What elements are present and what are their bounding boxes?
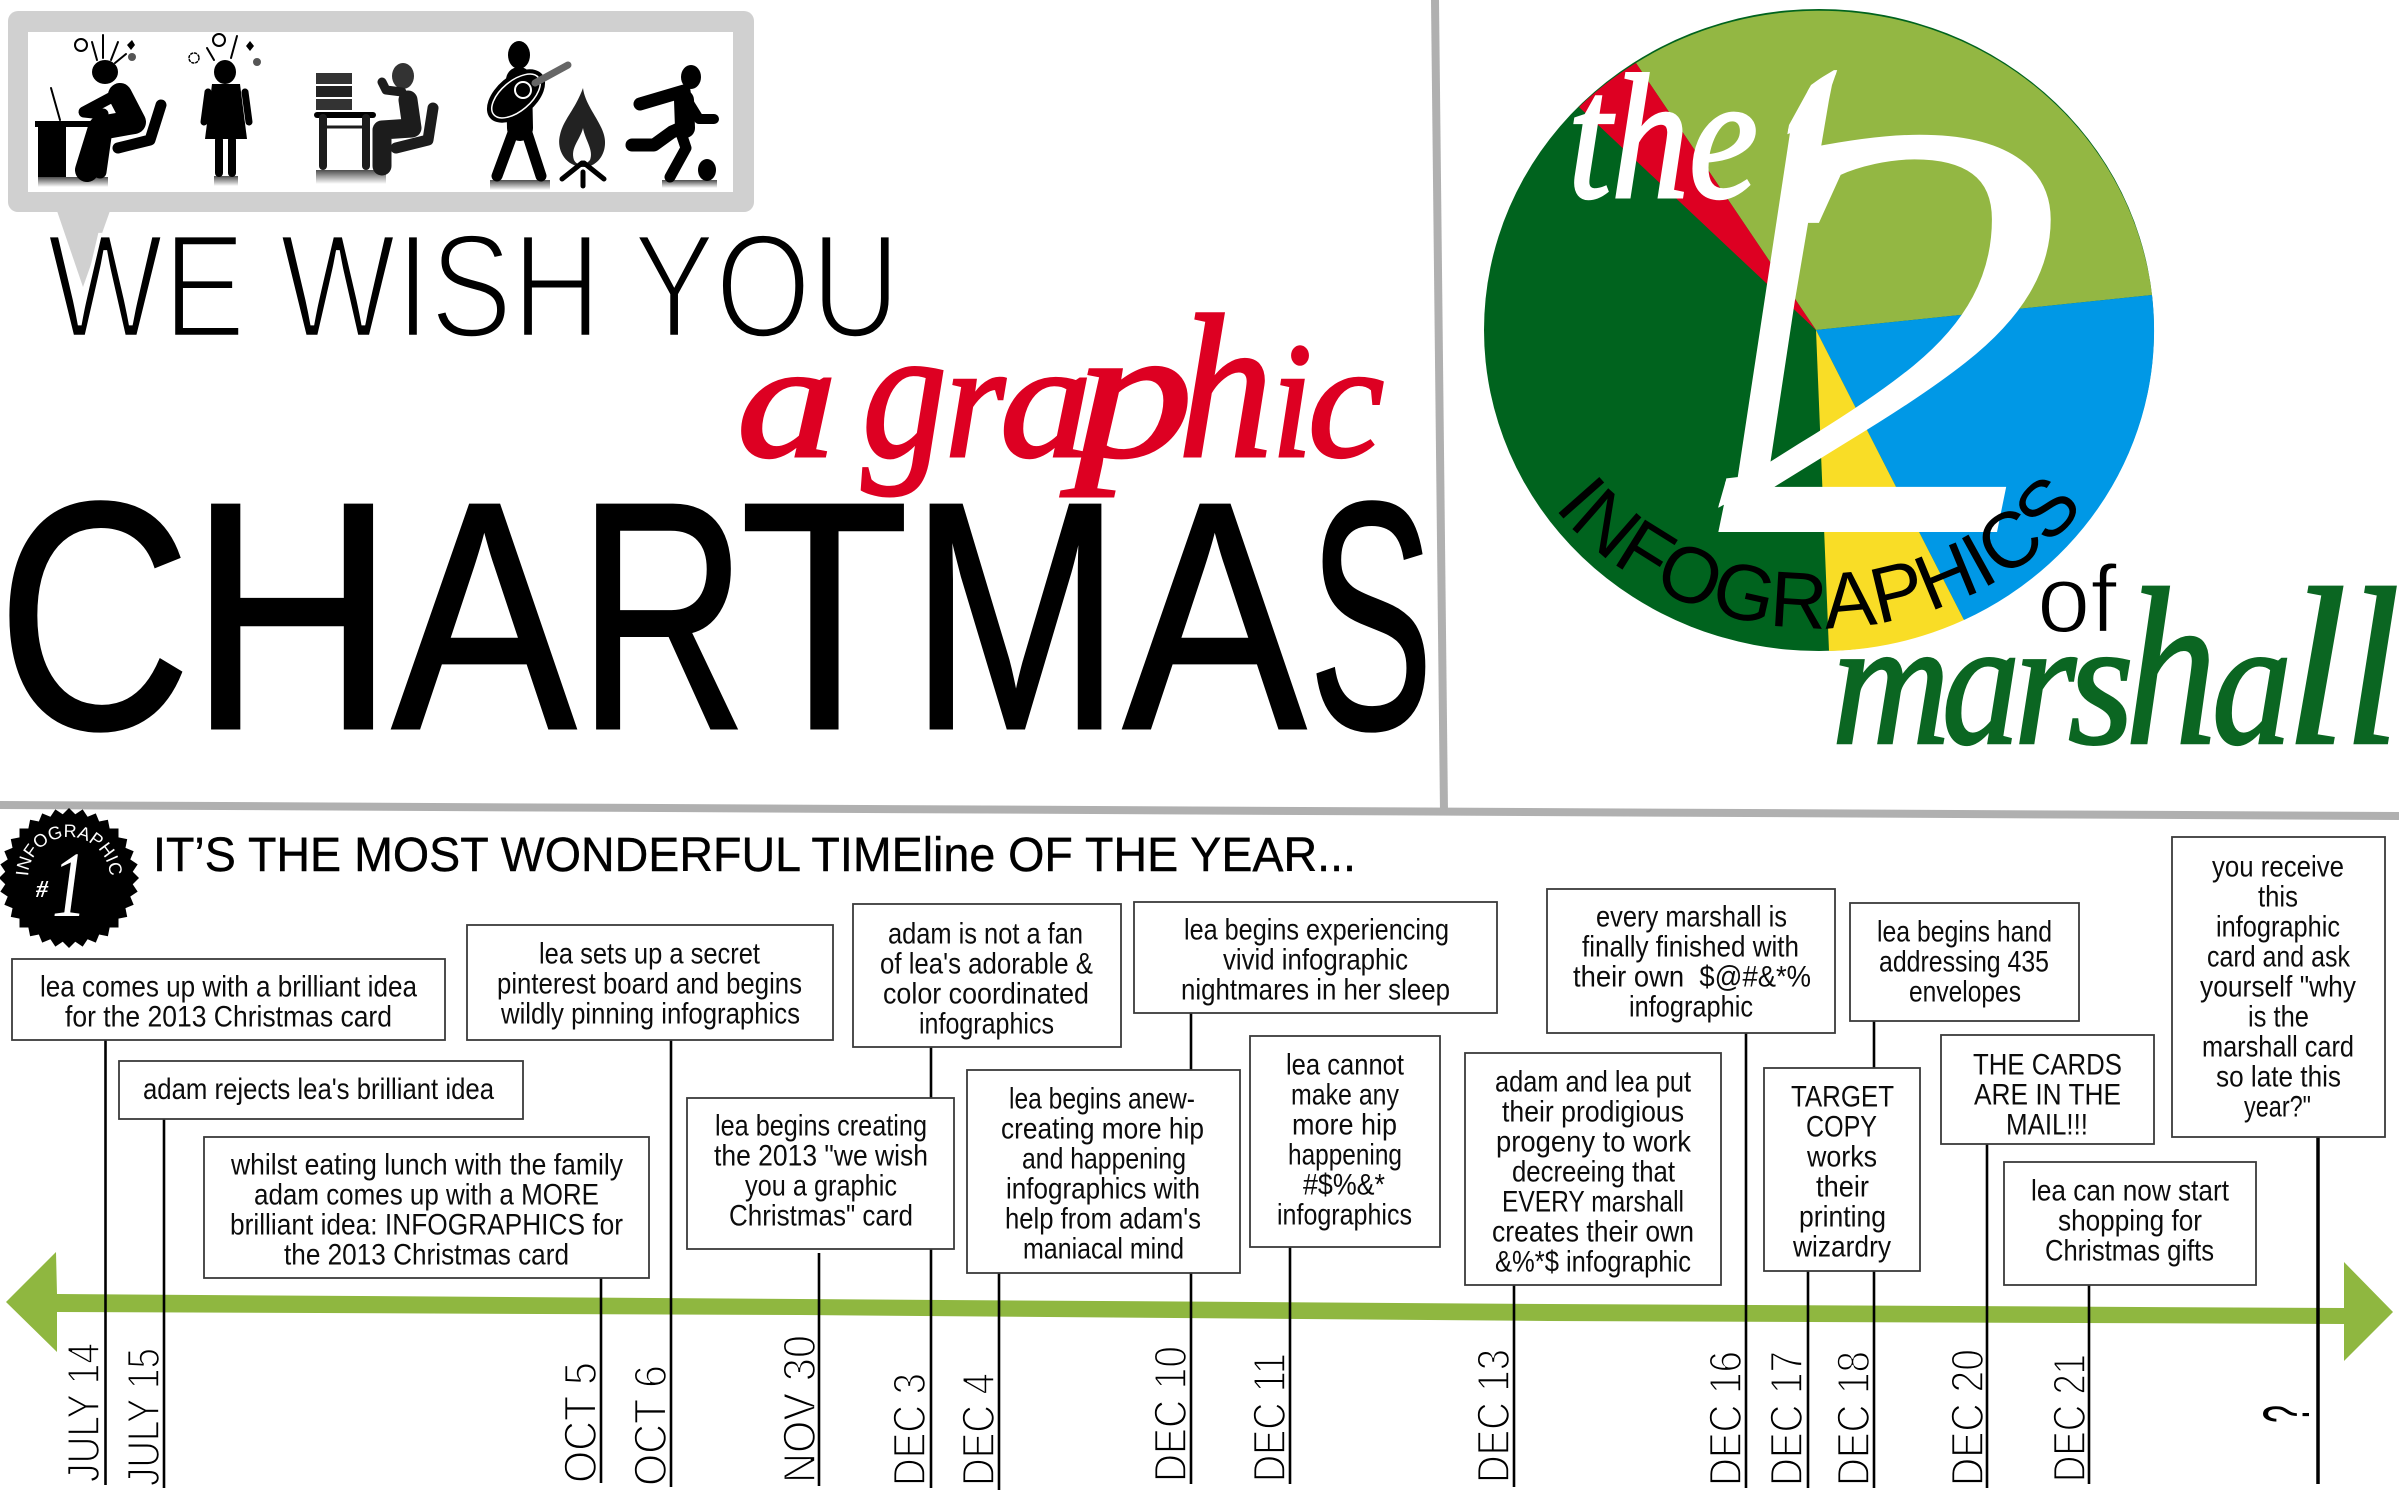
event: begins creating card: Christmas" card bbox=[729, 1200, 913, 1232]
event: hand addressing bbox=[1850, 903, 2079, 1021]
event: every marshall finished: infographic bbox=[1629, 990, 1753, 1024]
event: hand addressing: lea begins hand bbox=[1877, 916, 2052, 948]
event: prodigious progeny: decreeing that bbox=[1512, 1156, 1676, 1188]
title: a graphic script: c bbox=[1308, 309, 1384, 492]
event: cards in the mail: THE CARDS bbox=[1973, 1048, 2122, 1082]
event: adam is not a fan: of lea's adorable & bbox=[880, 948, 1093, 980]
event: lea cannot: make any bbox=[1291, 1078, 1399, 1112]
event: begins anew: infographics with bbox=[1006, 1172, 1200, 1206]
event: secret pinterest board bbox=[467, 925, 833, 1040]
event: shopping for gifts: shopping for bbox=[2058, 1204, 2202, 1238]
title: a graphic script: a bbox=[1000, 309, 1092, 492]
logo: pie chart bbox=[1484, 9, 2154, 651]
event: begins anew: lea begins anew- bbox=[1009, 1082, 1195, 1116]
event: begins anew bbox=[967, 1070, 1240, 1273]
date labels: DEC 16 bbox=[1700, 1351, 1751, 1486]
event: lea cannot: infographics bbox=[1277, 1198, 1412, 1232]
event: prodigious progeny bbox=[1465, 1053, 1721, 1285]
badge: infographic #1: 1 bbox=[52, 833, 87, 936]
event: adam is not a fan: color coordinated bbox=[883, 978, 1089, 1010]
event: every marshall finished: finally finished with bbox=[1582, 930, 1799, 964]
title: CHARTMAS: A bbox=[392, 435, 577, 797]
date labels: DEC 3 bbox=[884, 1373, 935, 1486]
event: nightmares: vivid infographic bbox=[1223, 944, 1408, 976]
date labels: DEC 10 bbox=[1145, 1346, 1196, 1482]
badge: infographic #1 bbox=[0, 808, 139, 948]
icon: running person kicking ball bbox=[632, 65, 717, 188]
date labels: DEC 18 bbox=[1828, 1351, 1879, 1486]
date labels: JULY 15 bbox=[118, 1348, 169, 1486]
title: CHARTMAS: A bbox=[1123, 435, 1307, 797]
event: you receive this: card and ask bbox=[2207, 940, 2351, 974]
event: you receive this: marshall card bbox=[2202, 1030, 2354, 1064]
event: adam is not a fan: adam is not a fan bbox=[888, 918, 1083, 950]
title: a graphic script: g bbox=[862, 288, 947, 497]
event: prodigious progeny: creates their own bbox=[1492, 1216, 1694, 1248]
title: CHARTMAS: T bbox=[740, 435, 909, 797]
event: shopping for gifts: lea can now start bbox=[2031, 1174, 2230, 1208]
event: prodigious progeny: EVERY marshall bbox=[1502, 1186, 1684, 1218]
logo: numeral 12: 2 bbox=[1718, 0, 2066, 662]
title: WE WISH YOU: WE WISH YOU bbox=[47, 204, 900, 369]
logo: of: of bbox=[2037, 546, 2117, 653]
event: target copy: works bbox=[1806, 1140, 1877, 1174]
event: you receive this: year?" bbox=[2244, 1090, 2311, 1124]
logo: numeral 12 bbox=[1718, 70, 2051, 532]
logo: marshall script: a bbox=[2212, 583, 2292, 782]
timeline stems bbox=[106, 1013, 2318, 1490]
event: nightmares bbox=[1134, 902, 1497, 1013]
event: begins anew: and happening bbox=[1022, 1142, 1186, 1176]
event: lea comes up with idea bbox=[12, 959, 445, 1040]
event: whilst eating lunch: whilst eating lunch with the family bbox=[230, 1148, 623, 1182]
title: a graphic script: r bbox=[945, 309, 1006, 492]
event: secret pinterest board: wildly pinning infographics bbox=[500, 998, 800, 1030]
event: whilst eating lunch: brilliant idea: INFOGRAPHICS for bbox=[230, 1208, 623, 1242]
title: a graphic script: h bbox=[1178, 274, 1273, 501]
event: secret pinterest board: lea sets up a secret bbox=[539, 938, 761, 970]
event: shopping for gifts bbox=[2004, 1162, 2256, 1285]
event: target copy: their bbox=[1816, 1170, 1869, 1204]
event: lea cannot: happening bbox=[1288, 1138, 1402, 1172]
event: begins creating card bbox=[687, 1098, 954, 1249]
event: cards in the mail: MAIL!!! bbox=[2006, 1108, 2088, 1142]
date labels: DEC 11 bbox=[1244, 1353, 1295, 1482]
event: cards in the mail: ARE IN THE bbox=[1974, 1078, 2121, 1112]
logo: the: the bbox=[1568, 38, 1758, 236]
timeline arrow bbox=[6, 1252, 2393, 1361]
event: you receive this: so late this bbox=[2216, 1060, 2341, 1094]
event: you receive this: yourself "why bbox=[2200, 970, 2356, 1004]
event: cards in the mail bbox=[1941, 1035, 2154, 1144]
event: nightmares: lea begins experiencing bbox=[1184, 914, 1449, 946]
icon: stressed person at laptop bbox=[35, 35, 161, 187]
event: adam rejects: adam rejects lea's brilliant idea bbox=[143, 1073, 494, 1106]
logo: marshall script: l bbox=[2285, 542, 2347, 792]
title: a graphic script: p bbox=[1060, 288, 1193, 497]
date labels: DEC 21 bbox=[2044, 1354, 2095, 1482]
event: you receive this: infographic bbox=[2216, 910, 2340, 944]
event: prodigious progeny: progeny to work bbox=[1496, 1126, 1692, 1158]
event: adam is not a fan: infographics bbox=[919, 1008, 1054, 1040]
title: CHARTMAS: M bbox=[910, 435, 1121, 797]
date labels: JULY 14 bbox=[58, 1343, 109, 1482]
event: prodigious progeny: &%*$ infographic bbox=[1495, 1246, 1691, 1278]
badge: infographic #1: # bbox=[35, 877, 49, 903]
event: begins anew: maniacal mind bbox=[1023, 1232, 1184, 1266]
event: lea cannot: more hip bbox=[1292, 1108, 1397, 1142]
event: shopping for gifts: Christmas gifts bbox=[2045, 1234, 2214, 1268]
event: you receive this: is the bbox=[2248, 1000, 2309, 1034]
date labels: OCT 6 bbox=[625, 1365, 676, 1486]
event: lea comes up with idea: lea comes up with a brilliant idea bbox=[40, 970, 417, 1004]
event: target copy: COPY bbox=[1806, 1110, 1877, 1144]
event: hand addressing: addressing 435 bbox=[1879, 946, 2049, 978]
event: whilst eating lunch bbox=[204, 1137, 649, 1278]
logo: marshall script: a bbox=[1942, 583, 2020, 782]
event: adam is not a fan bbox=[853, 904, 1121, 1047]
event: target copy: wizardry bbox=[1792, 1230, 1891, 1264]
event: secret pinterest board: pinterest board and begins bbox=[497, 968, 802, 1000]
event: whilst eating lunch: the 2013 Christmas card bbox=[284, 1238, 569, 1272]
badge: infographic #1: INFOGRAPHIC bbox=[16, 824, 122, 875]
event: target copy: TARGET bbox=[1791, 1080, 1894, 1114]
event: begins creating card: the 2013 "we wish bbox=[714, 1140, 928, 1172]
event: adam rejects bbox=[119, 1061, 523, 1119]
date labels: OCT 5 bbox=[555, 1362, 606, 1483]
event: every marshall finished: their own $@#&*% bbox=[1573, 960, 1811, 994]
event: you receive this bbox=[2172, 837, 2385, 1137]
date labels bbox=[58, 1335, 2323, 1486]
event: begins creating card: you a graphic bbox=[745, 1170, 897, 1202]
icon: person at desk with books bbox=[314, 63, 433, 184]
event: prodigious progeny: adam and lea put bbox=[1495, 1066, 1692, 1098]
title: CHARTMAS: H bbox=[189, 435, 395, 797]
logo: curved INFOGRAPHICS: INFOGRAPHICS bbox=[1558, 477, 2076, 629]
event: every marshall finished bbox=[1547, 889, 1835, 1033]
logo: marshall script: r bbox=[2014, 583, 2077, 782]
date labels: DEC 4 bbox=[953, 1373, 1004, 1486]
event: you receive this: you receive bbox=[2212, 850, 2344, 884]
icon: stressed woman bbox=[189, 34, 261, 186]
logo: marshall script: h bbox=[2125, 542, 2217, 792]
event: lea cannot bbox=[1250, 1036, 1440, 1247]
event: whilst eating lunch: adam comes up with a MORE bbox=[254, 1178, 599, 1212]
event: prodigious progeny: their prodigious bbox=[1502, 1096, 1684, 1128]
title: a graphic script: a bbox=[737, 309, 837, 492]
title: CHARTMAS: R bbox=[578, 435, 747, 797]
panel dividers bbox=[0, 0, 2399, 816]
event: hand addressing: envelopes bbox=[1909, 976, 2021, 1008]
title: CHARTMAS: C bbox=[0, 435, 191, 797]
title: a graphic script: i bbox=[1272, 309, 1312, 492]
date labels: DEC 20 bbox=[1942, 1349, 1993, 1486]
date labels: ? bbox=[2249, 1405, 2323, 1423]
speech bubble with pictograms bbox=[8, 11, 754, 287]
event: lea comes up with idea: for the 2013 Christmas card bbox=[65, 1000, 392, 1034]
date labels: NOV 30 bbox=[774, 1335, 825, 1483]
date labels: DEC 13 bbox=[1468, 1349, 1519, 1483]
event: begins creating card: lea begins creating bbox=[715, 1110, 927, 1142]
event: lea cannot: lea cannot bbox=[1286, 1048, 1405, 1082]
logo: marshall script: s bbox=[2068, 583, 2134, 782]
heading: timeline: IT’S THE MOST WONDERFUL TIMEline OF THE YEAR... bbox=[153, 829, 1356, 882]
event: nightmares: nightmares in her sleep bbox=[1181, 974, 1450, 1006]
logo: marshall script: m bbox=[1832, 583, 1950, 782]
event: begins anew: help from adam's bbox=[1005, 1202, 1201, 1236]
event: every marshall finished: every marshall is bbox=[1596, 900, 1787, 934]
event: begins anew: creating more hip bbox=[1001, 1112, 1204, 1146]
event: you receive this: this bbox=[2258, 880, 2298, 914]
icon: guitar player and campfire bbox=[477, 41, 605, 190]
event: target copy: printing bbox=[1799, 1200, 1886, 1234]
title: CHARTMAS: S bbox=[1309, 435, 1433, 797]
date labels: DEC 17 bbox=[1761, 1351, 1812, 1486]
event: target copy bbox=[1764, 1068, 1920, 1271]
event: lea cannot: #$%&* bbox=[1303, 1168, 1385, 1202]
